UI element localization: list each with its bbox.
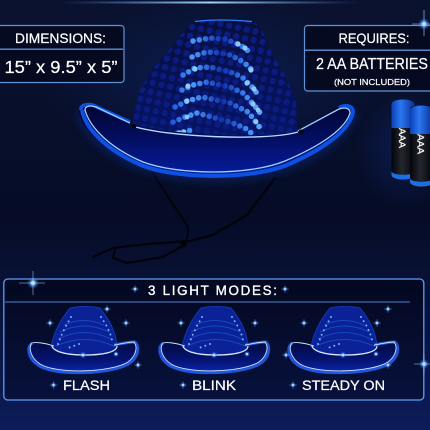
top glow line — [60, 2, 360, 4]
panel divider — [5, 302, 410, 303]
main hat — [79, 20, 355, 179]
brim EL wire — [85, 106, 350, 172]
panel: batteries required — [304, 26, 430, 91]
star: requires panel corner — [412, 10, 430, 36]
hat glow — [79, 112, 355, 179]
chin cord — [93, 172, 275, 263]
label: blink: BLINK — [192, 378, 236, 393]
heading: requires: REQUIRES: — [338, 31, 410, 46]
bright sequins — [176, 41, 260, 136]
batteries — [392, 100, 430, 187]
crown top rim — [195, 20, 252, 22]
battery 2: AAA — [414, 134, 426, 155]
heading: 3 light modes: 3 LIGHT MODES: — [148, 283, 277, 298]
hat brim — [79, 104, 355, 178]
hat: flash — [27, 306, 138, 374]
battery 1: AAA — [396, 128, 407, 149]
hat crown — [132, 20, 297, 140]
hat: steady on — [287, 306, 398, 374]
brim outer band — [82, 106, 353, 176]
stars — [19, 271, 430, 389]
heading: dimensions: DIMENSIONS: — [15, 31, 106, 46]
label: steady on: STEADY ON — [302, 378, 385, 393]
panel: light modes — [4, 271, 430, 400]
note: not included: (NOT INCLUDED) — [334, 78, 410, 87]
sequin rows — [173, 38, 263, 136]
label: flash: FLASH — [63, 378, 110, 393]
hat: blink — [158, 306, 270, 374]
dimensions value: 15” x 9.5” x 5” — [4, 57, 118, 77]
panel: dimensions — [0, 26, 124, 82]
hat band EL wire — [136, 127, 298, 137]
